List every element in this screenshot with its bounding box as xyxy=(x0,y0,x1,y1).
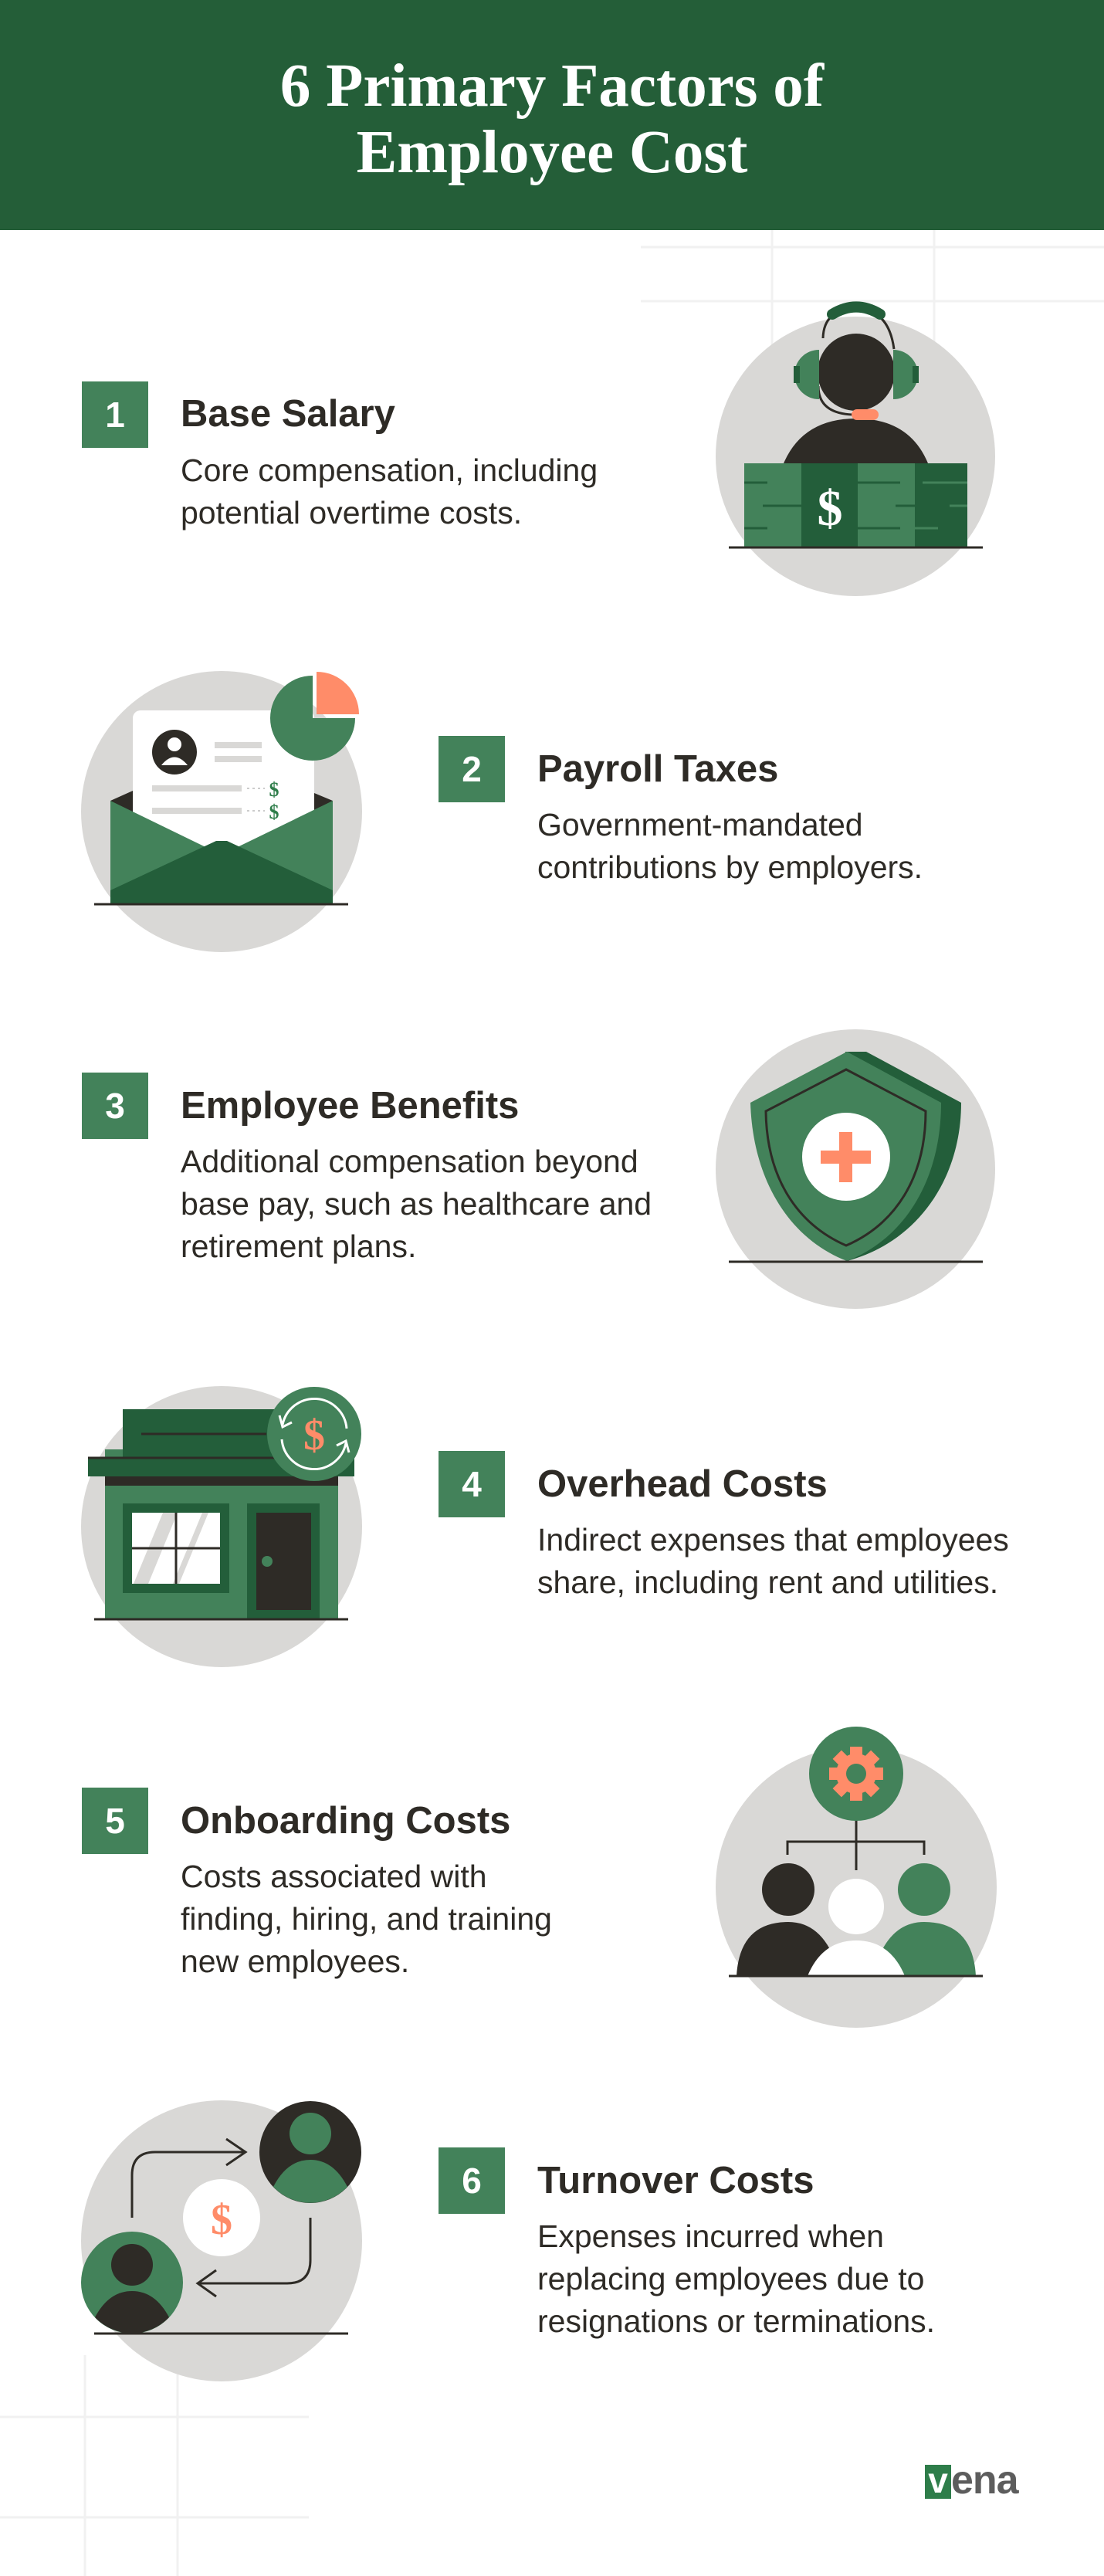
number badge 3: 3 xyxy=(105,1086,125,1126)
number badge 2: 2 xyxy=(462,749,482,789)
number badge 6: 6 xyxy=(462,2161,482,2201)
heading: overhead costs: Overhead Costs xyxy=(537,1463,828,1505)
icon: storefront with dollar coin: $ xyxy=(303,1412,325,1459)
item 4: overhead costs xyxy=(439,1451,1009,1600)
item 1: base salary xyxy=(82,381,598,530)
text: overhead description: share, including rent and utilities. xyxy=(537,1564,998,1600)
icon: turnover exchange between people xyxy=(81,2100,362,2381)
text: overhead description: Indirect expenses that employees xyxy=(537,1522,1009,1557)
text: benefits description: base pay, such as healthcare and xyxy=(181,1186,652,1222)
heading: base salary: Base Salary xyxy=(181,393,395,435)
item 5: onboarding costs xyxy=(82,1788,552,1979)
number badge 4: 4 xyxy=(462,1464,482,1504)
text: payroll description: Government-mandated xyxy=(537,807,863,842)
number badge 4 xyxy=(439,1451,505,1517)
number badge 1 xyxy=(82,381,148,448)
number badge 1: 1 xyxy=(105,395,125,435)
icon: headset person with money xyxy=(716,307,995,596)
title xyxy=(280,53,825,186)
text: turnover description: Expenses incurred when xyxy=(537,2218,884,2254)
text: payroll description: contributions by employers. xyxy=(537,849,923,885)
icon: turnover exchange between people: $ xyxy=(211,2196,232,2244)
text: base salary description xyxy=(181,452,598,530)
number badge 5: 5 xyxy=(105,1801,125,1841)
number badge 5 xyxy=(82,1788,148,1854)
number badge 2 xyxy=(439,736,505,802)
heading: payroll taxes: Payroll Taxes xyxy=(537,748,778,790)
item 2: payroll taxes xyxy=(439,736,923,885)
logo: vena: ena xyxy=(951,2458,1018,2503)
text: benefits description xyxy=(181,1144,652,1264)
heading: onboarding costs: Onboarding Costs xyxy=(181,1800,510,1842)
item 3: employee benefits xyxy=(82,1073,652,1264)
text: turnover description: resignations or terminations. xyxy=(537,2303,935,2339)
number badge 3 xyxy=(82,1073,148,1139)
icon: shield with plus xyxy=(716,1029,995,1309)
item 6: turnover costs xyxy=(439,2147,935,2339)
text: onboarding description xyxy=(181,1859,552,1979)
logo: vena: v xyxy=(928,2460,948,2500)
text: base salary description: potential overtime costs. xyxy=(181,495,522,530)
text: onboarding description: Costs associated with xyxy=(181,1859,487,1894)
header banner xyxy=(0,0,1104,230)
icon: storefront with dollar coin xyxy=(81,1386,362,1667)
text: payroll description xyxy=(537,807,923,885)
text: turnover description: replacing employees due to xyxy=(537,2261,924,2296)
text: overhead description xyxy=(537,1522,1009,1600)
text: benefits description: retirement plans. xyxy=(181,1229,416,1264)
heading: turnover costs: Turnover Costs xyxy=(537,2160,814,2201)
icon: headset person with money: $ xyxy=(817,480,843,537)
text: onboarding description: new employees. xyxy=(181,1944,409,1979)
title: Employee Cost xyxy=(357,119,747,186)
heading: employee benefits: Employee Benefits xyxy=(181,1085,519,1127)
text: onboarding description: finding, hiring, and training xyxy=(181,1901,552,1937)
icon: team with gear xyxy=(716,1727,997,2028)
text: base salary description: Core compensation, including xyxy=(181,452,598,488)
text: turnover description xyxy=(537,2218,935,2339)
icon: envelope payslip with pie chart: $ xyxy=(269,801,279,823)
number badge 6 xyxy=(439,2147,505,2214)
icon: envelope payslip with pie chart: $ xyxy=(269,778,279,801)
title: 6 Primary Factors of xyxy=(280,53,824,120)
icon: envelope payslip with pie chart xyxy=(81,671,362,952)
text: benefits description: Additional compensation beyond xyxy=(181,1144,638,1179)
